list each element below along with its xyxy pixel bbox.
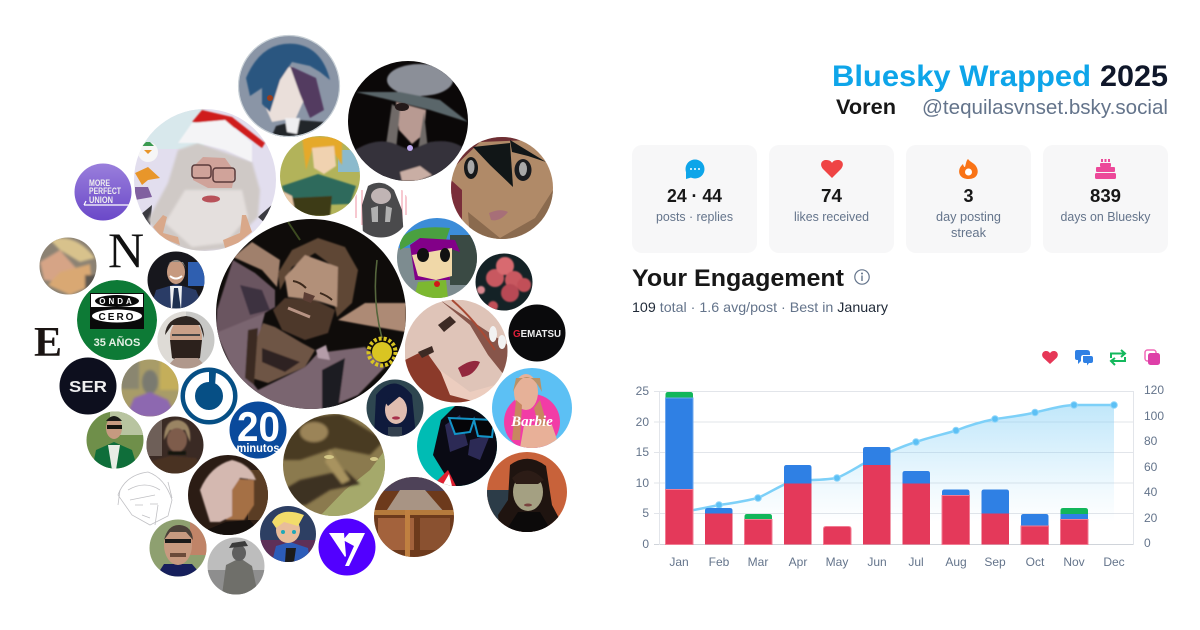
- avatar: Onda Cero logo: ONDA: [99, 297, 135, 306]
- panel: posting streak: streak: [951, 225, 986, 240]
- month labels: Apr: [789, 555, 807, 569]
- avatar: Onda Cero logo: [77, 280, 157, 360]
- engagement summary: 109 total · 1.6 avg/post · Best in January: [632, 299, 888, 315]
- panel: posts and replies: posts · replies: [656, 209, 733, 224]
- panel: days on Bluesky: 839: [1090, 186, 1121, 206]
- heading: Your Engagement: Your Engagement: [632, 265, 844, 292]
- avatar: The Verge logo: [318, 518, 376, 576]
- bar: Feb: [705, 508, 732, 544]
- avatar: red-haired woman: [405, 300, 508, 403]
- avatar: Barbie poster: Barbie: [510, 414, 553, 430]
- panel: posts and replies: [632, 145, 757, 253]
- avatar: SER logo: [60, 358, 116, 414]
- avatar: Barbie poster: [492, 368, 572, 450]
- avatar: super saiyan anime fighter: [280, 136, 360, 216]
- gridlines: [654, 391, 1134, 545]
- bar: Sep: [982, 490, 1009, 544]
- month labels: Nov: [1063, 555, 1085, 569]
- panel: posting streak: [906, 145, 1031, 253]
- avatar: pencil sketch: [118, 472, 172, 525]
- panel: days on Bluesky: days on Bluesky: [1060, 209, 1151, 224]
- line points: [716, 402, 1117, 508]
- right axis labels: [1144, 383, 1164, 550]
- right axis labels: 0: [1144, 536, 1151, 550]
- avatar: SER logo: SER: [69, 379, 108, 396]
- right axis labels: 120: [1144, 383, 1164, 397]
- panel: days on Bluesky: [1043, 145, 1168, 253]
- cumulative line: [679, 405, 1114, 512]
- bar: Jun: [863, 447, 890, 544]
- avatar: More Perfect Union logo: UNION: [89, 195, 113, 205]
- avatar: cyclist with sunglasses: [86, 411, 144, 470]
- user handle: @tequilasvnset.bsky.social: [922, 97, 1168, 119]
- avatar: anime face close-up: [451, 137, 553, 239]
- month labels: Dec: [1103, 555, 1125, 569]
- avatar: tree creature: [283, 414, 385, 516]
- avatar: Darth Vader with glasses: [417, 406, 497, 486]
- right axis labels: 20: [1144, 511, 1158, 525]
- bar: Jan: [666, 392, 693, 544]
- cumulative area: [679, 405, 1114, 544]
- avatar: santa filter man: [134, 109, 276, 252]
- title: 2025: [1100, 60, 1168, 93]
- left axis labels: 20: [636, 415, 649, 429]
- month labels: Aug: [945, 555, 967, 569]
- avatar: city bridge at night: [374, 477, 454, 557]
- avatar: sleeping woman with cat: [39, 237, 99, 295]
- panel: posts and replies: 24 · 44: [667, 186, 722, 206]
- right axis labels: 100: [1144, 409, 1164, 423]
- right axis labels: 60: [1144, 460, 1158, 474]
- avatar: Gematsu logo: GEMATSU: [513, 328, 561, 340]
- avatar: dark blue-haired woman: [366, 379, 424, 437]
- icon: flame: [959, 159, 978, 179]
- bar: Mar: [744, 514, 772, 544]
- user name: Voren: [836, 96, 896, 119]
- avatar: More Perfect Union logo: MORE: [89, 178, 110, 188]
- month labels: [669, 555, 1125, 569]
- avatar: blond cartoon boy: [260, 506, 316, 562]
- icon: likes: [1042, 351, 1058, 364]
- left axis labels: 0: [642, 537, 649, 551]
- left axis labels: [636, 384, 649, 551]
- avatar: 20 minutos logo: 20: [237, 403, 280, 450]
- bar: Nov: [1060, 508, 1088, 544]
- icon: info: [855, 270, 869, 284]
- avatar: chibi blue-haired character: [238, 35, 340, 140]
- avatar: witch with hat and roses: [348, 61, 468, 181]
- avatar: silver-haired man: [188, 455, 268, 535]
- avatar: Onda Cero logo: CERO: [99, 312, 135, 323]
- month labels: Jul: [908, 555, 924, 569]
- panel: likes received: 74: [821, 186, 842, 206]
- avatar: grayscale comic character: [355, 182, 407, 238]
- icon: chat bubble: [686, 160, 704, 179]
- left axis labels: 15: [636, 445, 649, 459]
- avatar ring: [238, 36, 340, 136]
- avatar: vintage soldier photo: [207, 537, 265, 595]
- bar: Aug: [942, 490, 970, 544]
- stacked bars: [666, 392, 1088, 544]
- month labels: Jun: [867, 555, 887, 569]
- avatar: Link cartoon: [397, 218, 477, 298]
- month labels: Oct: [1026, 555, 1045, 569]
- panel: likes received: [769, 145, 894, 253]
- panel: posting streak: day posting: [936, 209, 1001, 224]
- month labels: Sep: [984, 555, 1006, 569]
- avatar: 20 minutos logo: [230, 402, 286, 458]
- avatar: N logo: N: [108, 222, 144, 278]
- avatar: Gematsu logo: [508, 304, 566, 362]
- avatar: raspberry cluster: [475, 253, 533, 311]
- icon: heart: [821, 160, 843, 178]
- avatar: Silent Hill heroine: [146, 416, 204, 474]
- right axis labels: 80: [1144, 434, 1158, 448]
- avatar cluster: [34, 35, 572, 595]
- panel: posting streak: 3: [964, 186, 974, 206]
- avatar: man in suit smiling: [147, 251, 206, 310]
- bar: Jul: [902, 471, 930, 544]
- avatar: E logo: E: [34, 320, 62, 366]
- panel: likes received: likes received: [794, 209, 869, 224]
- avatar: Onda Cero logo: 35 AÑOS: [94, 336, 140, 349]
- avatar: bearded man with glasses: [157, 311, 215, 369]
- avatar: smiling man with glasses: [149, 519, 208, 578]
- avatar: More Perfect Union logo: PERFECT: [89, 186, 121, 196]
- icon: birthday cake: [1095, 159, 1116, 179]
- santa hat: [178, 110, 265, 162]
- avatar: blue ring logo: [180, 368, 238, 424]
- avatar: 20 minutos logo: minutos: [236, 443, 280, 455]
- right axis labels: 40: [1144, 485, 1158, 499]
- month labels: May: [826, 555, 848, 569]
- month labels: Feb: [709, 555, 730, 569]
- avatar: sleeping bearded man: [216, 219, 406, 412]
- icon: replies: [1075, 350, 1093, 366]
- legend icons: [1042, 350, 1160, 366]
- left axis labels: 5: [642, 506, 649, 520]
- avatar: painted portrait of a girl: [487, 452, 567, 532]
- month labels: Mar: [748, 555, 768, 569]
- left axis labels: 25: [636, 384, 649, 398]
- month labels: Jan: [669, 555, 689, 569]
- bar: Apr: [784, 465, 812, 544]
- bar: Oct: [1021, 514, 1048, 544]
- title: Bluesky Wrapped: [832, 60, 1091, 93]
- avatar: More Perfect Union logo: [74, 163, 132, 221]
- left axis labels: 10: [636, 476, 649, 490]
- avatar: Bacon painting: [121, 359, 179, 417]
- icon: quotes: [1145, 350, 1160, 365]
- bar: May: [824, 526, 851, 544]
- chart: monthly engagement: [636, 383, 1164, 569]
- icon: reposts: [1111, 350, 1125, 365]
